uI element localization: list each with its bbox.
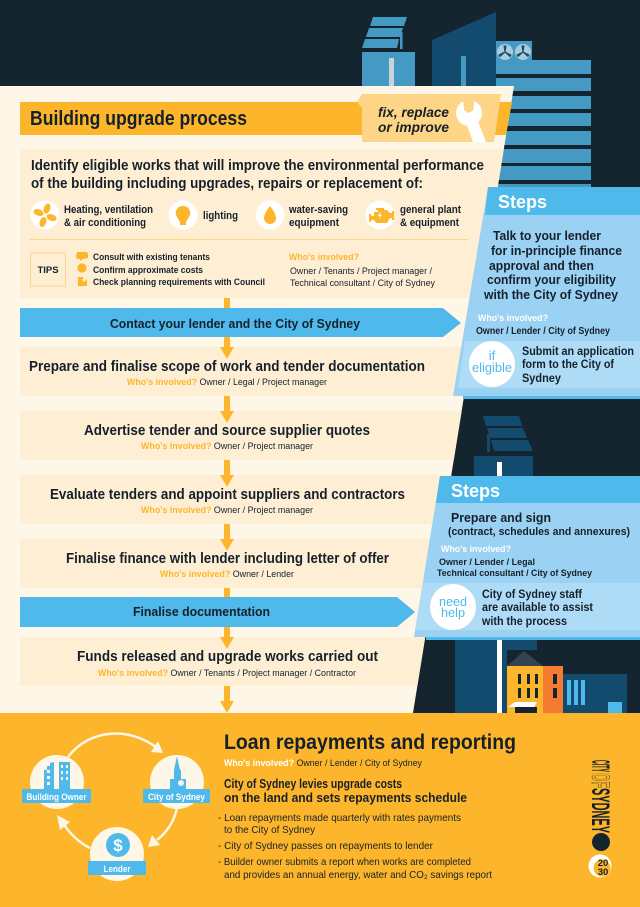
panel: steps 1: Sydney	[522, 373, 562, 385]
step: advertise tender	[84, 423, 370, 452]
panel: steps 2: Technical consultant / City of Sydney	[437, 568, 593, 579]
panel: loan repayments	[0, 713, 640, 907]
label: plant: general plant	[400, 204, 461, 216]
banner: contact lender: Contact your lender and the City of Sydney	[110, 316, 361, 331]
arrows: process flow	[220, 298, 234, 713]
tag: fix, replace or improve: or improve	[378, 120, 449, 135]
step: scope of work: Who's involved? Owner / Legal / Project manager	[127, 377, 327, 388]
icon: light bulb	[168, 200, 198, 230]
heading: eligible works	[31, 157, 484, 192]
logo: City of Sydney: OF	[586, 773, 614, 788]
logo: 2030: 20	[598, 858, 608, 869]
panel: steps 1: Submit an application	[522, 346, 634, 358]
badge: need help: need	[439, 594, 467, 609]
illustration: top buildings	[362, 12, 591, 188]
panel: steps 1: confirm your eligibility	[487, 272, 617, 287]
panel: steps 1: form to the City of	[522, 359, 614, 371]
text: repayment bullets: and provides an annual energy, water and CO₂ savings report	[224, 869, 492, 881]
banner: contact lender	[20, 308, 461, 337]
tips list	[76, 252, 265, 288]
text: repayment bullets: - Loan repayments made quarterly with rates payments	[218, 812, 461, 824]
diagram: repayment cycle	[22, 734, 210, 881]
banner: finalise documentation	[20, 597, 415, 627]
illustration: lower buildings	[455, 416, 627, 713]
badge: if eligible	[469, 341, 515, 387]
step: funds released: Funds released and upgrade works carried out	[77, 649, 378, 665]
who's involved: scope: Technical consultant / City of Sydney	[290, 278, 435, 289]
panel: steps 2: Prepare and sign	[451, 511, 551, 525]
text: repayment bullets	[218, 812, 492, 881]
panel: steps 1: Owner / Lender / City of Sydney	[476, 326, 610, 337]
label: heating: & air conditioning	[64, 217, 146, 229]
label: lender: Lender	[104, 864, 131, 874]
step: advertise tender: Who's involved? Owner / Project manager	[141, 441, 313, 452]
tag: fix, replace or improve	[357, 94, 501, 142]
step: scope of work	[29, 359, 425, 388]
icon: office buildings	[44, 762, 70, 790]
who's involved: scope: Who's involved?	[289, 252, 359, 263]
icon: clock tower	[170, 756, 186, 790]
panel: steps 2: are available to assist	[482, 602, 593, 614]
label: heating	[64, 204, 153, 229]
panel: steps 1: Steps	[498, 192, 547, 212]
label: heating: Heating, ventilation	[64, 204, 153, 216]
panel: steps 2	[414, 476, 640, 640]
label: plant	[400, 204, 461, 229]
icon: engine	[366, 200, 394, 230]
step: finalise finance: Who's involved? Owner / Lender	[160, 569, 294, 580]
badge: need help	[430, 584, 476, 630]
panel: steps 2: Owner / Lender / Legal	[439, 557, 535, 568]
step: evaluate tenders: Evaluate tenders and appoint suppliers and contractors	[50, 487, 405, 503]
who's involved: scope: Owner / Tenants / Project manager /	[290, 266, 432, 277]
subheading: levies: on the land and sets repayments schedule	[224, 791, 467, 805]
tips list: Confirm approximate costs	[93, 265, 203, 276]
badge: if eligible: eligible	[472, 360, 512, 375]
who's involved: scope	[289, 252, 435, 289]
step: evaluate tenders: Who's involved? Owner / Project manager	[141, 505, 313, 516]
step: funds released: Who's involved? Owner / Tenants / Project manager / Contractor	[98, 668, 356, 679]
panel: steps 1: approval and then	[489, 258, 594, 273]
tips box	[30, 253, 66, 286]
heading: loan repayments and reporting: Loan repayments and reporting	[224, 731, 516, 754]
title bar: Building upgrade process	[30, 108, 247, 130]
text: repayment bullets: - Builder owner submits a report when works are completed	[218, 856, 471, 868]
text: repayment bullets: - City of Sydney passes on repayments to lender	[218, 840, 433, 852]
label: building owner	[22, 789, 91, 803]
badge: need help: help	[441, 605, 465, 620]
panel: steps 1: for in-principle finance	[491, 243, 622, 258]
subheading: levies: City of Sydney levies upgrade costs	[224, 777, 402, 791]
logo: City of Sydney	[586, 760, 614, 851]
icon: dollar coin	[106, 833, 130, 857]
banner: finalise documentation: Finalise documentation	[133, 604, 270, 619]
tag: fix, replace or improve: fix, replace	[378, 105, 449, 120]
text: repayment bullets: to the City of Sydney	[224, 824, 316, 836]
step: funds released	[77, 649, 378, 679]
label: building owner: Building Owner	[26, 792, 87, 802]
tips list: Consult with existing tenants	[93, 252, 210, 263]
label: water: water-saving	[288, 204, 348, 216]
panel: steps 1: with the City of Sydney	[483, 287, 619, 302]
step: finalise finance: Finalise finance with lender including letter of offer	[66, 551, 389, 567]
icon: water drop	[256, 200, 284, 230]
logo: City of Sydney: CITY	[586, 760, 614, 772]
tips box: TIPS	[37, 265, 59, 276]
heading: eligible works: of the building including upgrades, repairs or replacement of:	[31, 175, 423, 192]
label: water: equipment	[289, 217, 339, 229]
heading: eligible works: Identify eligible works that will improve the environmental performance	[31, 157, 484, 174]
tips list: Check planning requirements with Council	[93, 277, 265, 288]
logo: 2030	[588, 854, 612, 878]
badge: if eligible: if	[489, 348, 496, 363]
main cream panel	[0, 86, 514, 713]
icon: fan	[30, 200, 60, 230]
step: advertise tender: Advertise tender and source supplier quotes	[84, 423, 370, 439]
label: plant: & equipment	[400, 217, 459, 229]
panel: steps 2: Steps	[451, 481, 500, 501]
scope panel	[20, 149, 520, 298]
logo: City of Sydney: SYDNEY	[586, 788, 614, 833]
step rows	[20, 347, 462, 686]
label: water	[288, 204, 348, 229]
subheading: levies	[224, 777, 467, 805]
panel: steps 1: Who's involved?	[478, 313, 548, 324]
icon: wrench	[456, 97, 486, 142]
label: lender	[88, 861, 146, 875]
logo: 2030: 30	[598, 867, 608, 878]
panel: steps 1	[453, 187, 640, 399]
title bar	[20, 102, 512, 135]
panel: steps 2: (contract, schedules and annexures)	[448, 526, 630, 538]
label: lighting: lighting	[203, 210, 238, 222]
step: scope of work: Prepare and finalise scope of work and tender documentation	[29, 359, 425, 375]
step: finalise finance	[66, 551, 389, 580]
who's involved: loan: Who's involved? Owner / Lender / City of Sydney	[224, 758, 422, 769]
step: evaluate tenders	[50, 487, 405, 516]
panel: steps 2: Who's involved?	[441, 544, 511, 555]
icon: dollar coin: $	[113, 836, 123, 855]
label: city of sydney: City of Sydney	[148, 792, 205, 802]
panel: steps 2: with the process	[481, 616, 567, 628]
panel: steps 2: City of Sydney staff	[482, 589, 582, 601]
panel: steps 1: Talk to your lender	[493, 228, 601, 243]
label: city of sydney	[143, 789, 210, 803]
